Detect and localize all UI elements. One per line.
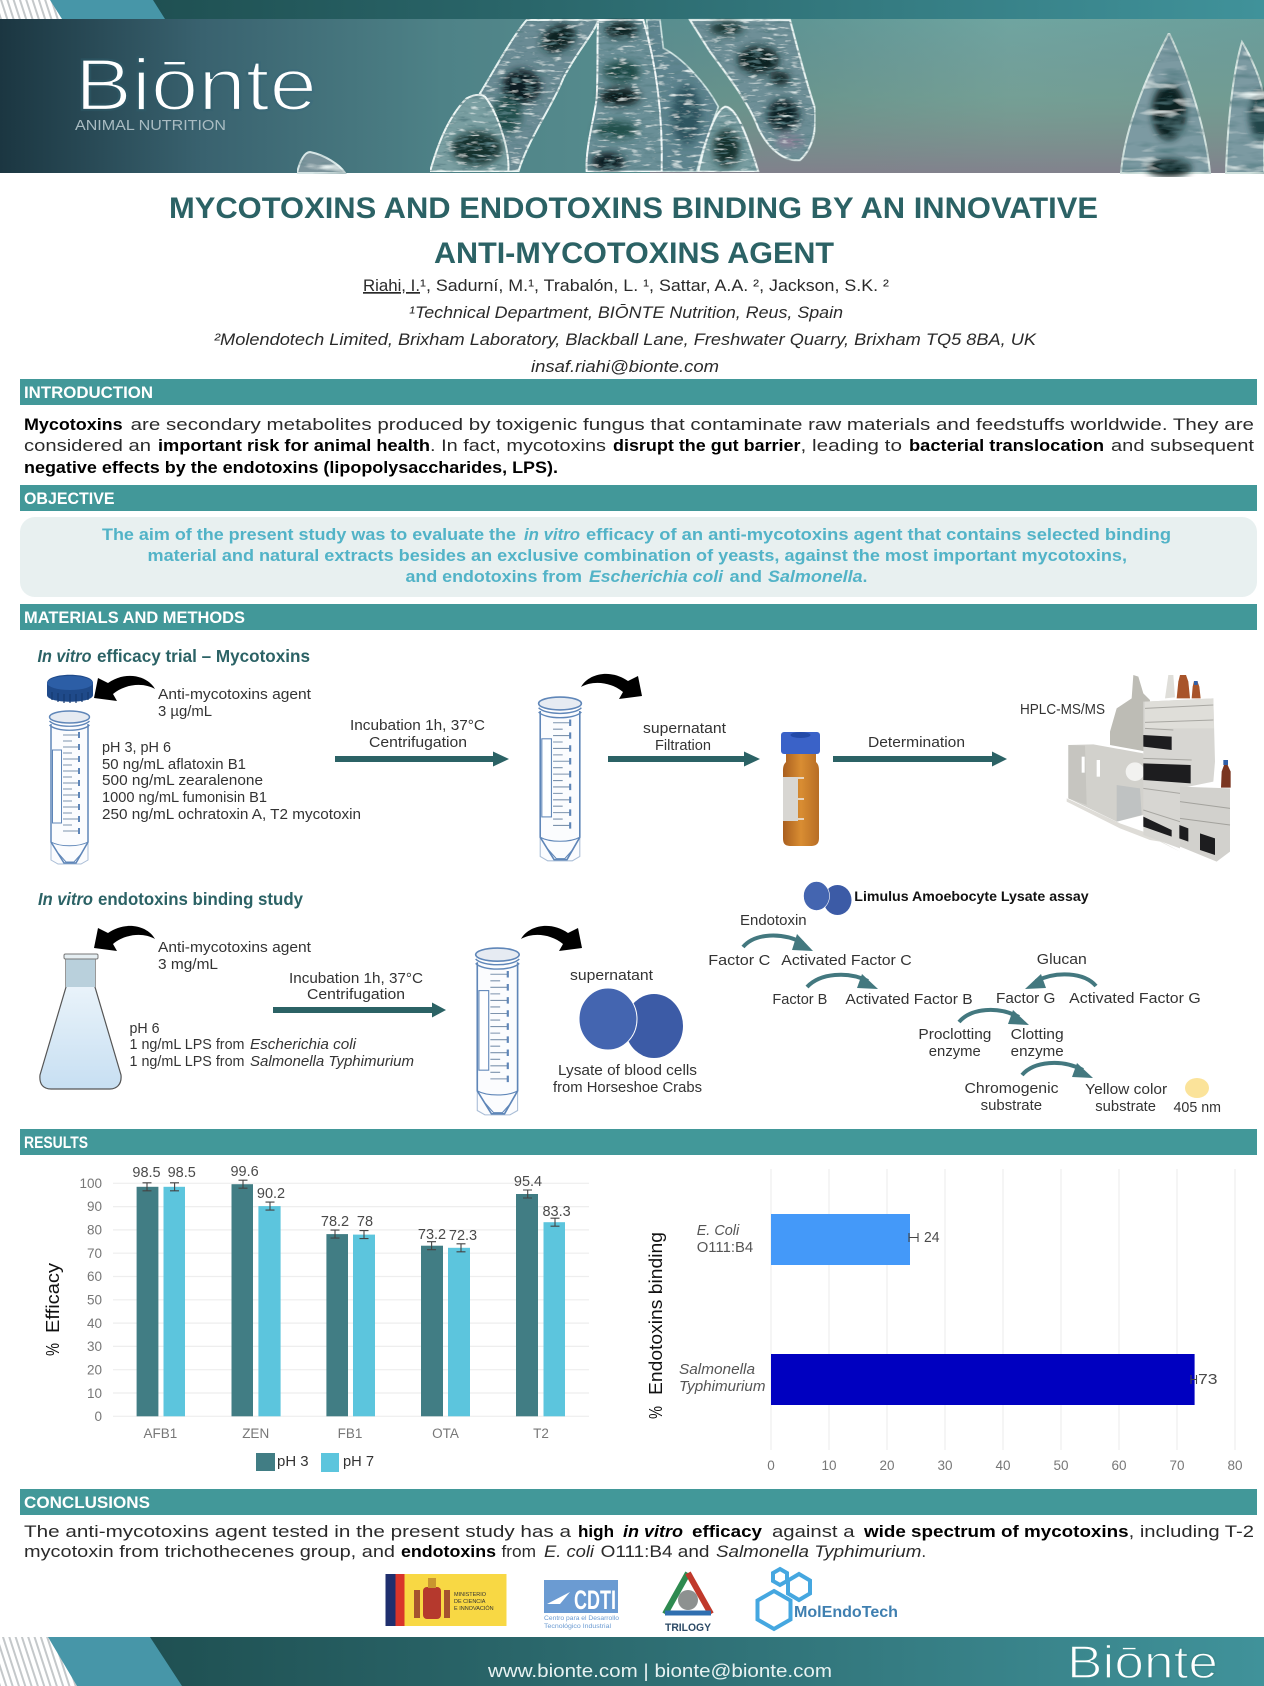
data labels: 95.4	[514, 1174, 542, 1190]
x axis labels: ZEN	[242, 1426, 269, 1441]
arrow: incubation	[273, 1002, 446, 1018]
data labels: 83.3	[542, 1204, 571, 1220]
heading: conclusions: CONCLUSIONS	[24, 1493, 150, 1512]
assay cascade labels: substrate	[1095, 1098, 1156, 1115]
x axis ticks: 50	[1053, 1458, 1069, 1473]
title	[169, 192, 1098, 270]
category labels: Typhimurium	[679, 1378, 766, 1395]
text block: introduction: . In fact, mycotoxins	[430, 436, 606, 455]
y axis ticks: 80	[87, 1222, 102, 1238]
subheading: mycotoxins trial: In vitro	[38, 646, 92, 666]
label: filtration	[643, 720, 727, 754]
data labels: 73	[1198, 1372, 1218, 1388]
logo: MolEndoTech: MolEndoTech	[794, 1604, 898, 1621]
text block: conclusions: in vitro	[623, 1522, 683, 1541]
text block: conclusions: high	[578, 1522, 614, 1541]
assay cascade labels: 405 nm	[1174, 1099, 1221, 1116]
panel: introduction	[20, 379, 1257, 477]
category labels	[679, 1222, 766, 1395]
legend	[256, 1453, 374, 1472]
logo: CDTI	[544, 1580, 619, 1630]
icon: black curved arrow	[521, 926, 582, 951]
logo: CDTI: CDTI	[574, 1585, 616, 1615]
bar chart: efficacy	[43, 1164, 589, 1472]
assay cascade labels: Factor C	[708, 952, 770, 969]
bars pH 7	[164, 1187, 565, 1416]
text block: mycotoxin concentrations	[102, 739, 361, 823]
text block: mycotoxin concentrations: 50 ng/mL aflatoxin B1	[102, 756, 246, 773]
y axis title: Efficacy	[43, 1263, 63, 1333]
text block: conclusions: efficacy	[692, 1522, 763, 1541]
data labels: 90.2	[257, 1186, 285, 1202]
objective callout: and endotoxins from	[406, 567, 582, 586]
text block: conclusions: E. coli	[544, 1542, 595, 1561]
bar: E. coli	[771, 1214, 910, 1265]
header banner	[0, 0, 1264, 177]
label: incubation: Incubation 1h, 37°C	[289, 970, 423, 987]
x axis labels: OTA	[432, 1426, 459, 1441]
assay cascade labels: Activated Factor B	[845, 991, 973, 1008]
data labels: 98.5	[168, 1165, 196, 1181]
arrows: cascade	[743, 934, 1096, 1078]
text block: introduction: bacterial translocation	[909, 436, 1104, 455]
icon: HPLC instrument	[1067, 675, 1231, 862]
x axis ticks: 40	[995, 1458, 1011, 1473]
label: agent dose	[158, 686, 312, 720]
authors and affiliations: ¹, Sadurní, M.¹, Trabalón, L. ¹, Sattar, A.A. ², Jackson, S.K. ²	[420, 276, 889, 295]
heading: objective	[20, 485, 1257, 511]
icon: black curved arrow	[94, 926, 155, 951]
heading: conclusions	[20, 1489, 1257, 1515]
label: agent dose	[158, 939, 312, 973]
text block: LPS concentrations: 1 ng/mL LPS from	[130, 1053, 244, 1070]
y axis title	[43, 1263, 63, 1356]
x axis ticks: 30	[937, 1458, 953, 1473]
objective callout: in vitro	[524, 525, 580, 544]
objective callout: and	[730, 567, 762, 586]
x axis ticks: 10	[821, 1458, 837, 1473]
label: agent dose: Anti-mycotoxins agent	[158, 939, 312, 956]
icon: blood cells	[579, 988, 683, 1058]
arrow: incubation	[335, 752, 509, 766]
label: incubation: Centrifugation	[369, 734, 467, 751]
text block: conclusions: Salmonella Typhimurium	[716, 1542, 921, 1561]
icon: amber vial	[781, 732, 820, 846]
panel: results	[20, 1129, 1257, 1473]
x axis ticks: 70	[1169, 1458, 1185, 1473]
label: incubation	[289, 970, 423, 1003]
title: MYCOTOXINS AND ENDOTOXINS BINDING BY AN INNOVATIVE	[169, 192, 1098, 225]
icon: centrifuge tube	[50, 711, 90, 864]
icon: black curved arrow	[94, 676, 155, 701]
y axis ticks: 40	[87, 1316, 102, 1331]
logo: Trilogy	[663, 1571, 713, 1634]
arrow: determination	[833, 752, 1007, 766]
label: agent dose: 3 mg/mL	[158, 956, 218, 973]
panel: limulus amoebocyte lysate assay	[708, 882, 1221, 1116]
authors and affiliations: Riahi, I.	[363, 276, 420, 295]
data labels	[132, 1164, 571, 1244]
category labels: E. Coli	[697, 1222, 740, 1239]
logo: Trilogy: TRILOGY	[665, 1622, 712, 1634]
text block: conclusions: O111:B4 and	[601, 1542, 709, 1561]
text block: conclusions: endotoxins	[401, 1542, 496, 1561]
x axis ticks: 60	[1111, 1458, 1127, 1473]
label: lysate source: from Horseshoe Crabs	[553, 1079, 702, 1096]
heading: materials and methods: MATERIALS AND METHODS	[24, 608, 245, 627]
text block: LPS concentrations: 1 ng/mL LPS from	[130, 1036, 244, 1053]
text block: LPS concentrations: Escherichia coli	[250, 1036, 357, 1053]
y axis ticks: 100	[79, 1176, 102, 1191]
data labels: 78.2	[321, 1214, 349, 1230]
heading: LAL assay: Limulus Amoebocyte Lysate assay	[854, 888, 1089, 904]
y axis ticks: 90	[87, 1199, 102, 1214]
authors and affiliations: insaf.riahi@bionte.com	[531, 357, 719, 376]
text block: introduction: important risk for animal health	[158, 436, 430, 455]
assay cascade labels: Activated Factor C	[781, 952, 912, 969]
subheading: endotoxin study: In vitro	[38, 889, 93, 909]
icon: blood cells small	[804, 882, 852, 915]
text block: mycotoxin concentrations: 1000 ng/mL fumonisin B1	[102, 789, 267, 806]
text block: introduction: Mycotoxins	[24, 415, 123, 434]
logo: Ministerio de Ciencia e Innovacion: DE CIENCIA	[454, 1599, 486, 1605]
icon: centrifuge tube	[476, 948, 519, 1115]
text block: conclusions: The anti-mycotoxins agent tested in the present study has a	[24, 1522, 572, 1541]
label: agent dose: 3 µg/mL	[158, 703, 212, 720]
assay cascade labels	[708, 912, 1221, 1116]
text block: LPS concentrations	[130, 1020, 414, 1070]
authors and affiliations: ¹Technical Department, BIŌNTE Nutrition, Reus, Spain	[409, 303, 843, 322]
y axis ticks: 50	[87, 1292, 102, 1308]
objective callout: material and natural extracts besides an exclusive combination of yeasts, against the most important mycotoxins,	[148, 546, 1127, 565]
assay cascade labels: enzyme	[929, 1043, 981, 1060]
text block: introduction: negative effects by the endotoxins (lipopolysaccharides, LPS).	[24, 458, 558, 477]
x axis ticks: 20	[879, 1458, 895, 1473]
y axis ticks: 70	[87, 1246, 102, 1261]
heading: introduction	[20, 379, 1257, 405]
heading: results	[20, 1129, 1257, 1155]
icon: black curved arrow	[581, 674, 642, 699]
x axis labels	[144, 1426, 549, 1441]
text block: introduction: , leading to	[800, 436, 902, 455]
assay cascade labels: Chromogenic	[964, 1080, 1059, 1097]
heading: introduction: INTRODUCTION	[24, 383, 153, 402]
objective callout: Escherichia coli	[589, 567, 724, 586]
error bars	[909, 1233, 1196, 1384]
objective callout: .	[863, 567, 867, 586]
label: lysate source	[553, 1062, 702, 1096]
y axis ticks: 30	[87, 1339, 102, 1354]
text block: introduction: are secondary metabolites produced by toxigenic fungus that contaminate raw materials and feedstuffs worldwide. They are	[131, 415, 1254, 434]
logo: Ministerio de Ciencia e Innovacion: MINISTERIO	[454, 1592, 487, 1598]
y axis title: %	[43, 1343, 63, 1356]
x axis labels: AFB1	[144, 1426, 177, 1441]
logo: Bionte: ANIMAL NUTRITION	[75, 117, 226, 134]
authors and affiliations	[214, 276, 1037, 376]
assay cascade labels: Activated Factor G	[1069, 990, 1201, 1007]
x axis labels: FB1	[338, 1426, 362, 1441]
objective callout: Salmonella	[768, 567, 863, 586]
text block: mycotoxin concentrations: pH 3, pH 6	[102, 739, 171, 756]
assay cascade labels: substrate	[981, 1097, 1042, 1114]
text block: conclusions: against a	[772, 1522, 855, 1541]
illustration: bacteria	[297, 18, 1264, 177]
y axis ticks	[79, 1176, 102, 1424]
bar chart: endotoxins binding	[646, 1169, 1243, 1473]
authors and affiliations: ²Molendotech Limited, Brixham Laboratory, Blackball Lane, Freshwater Quarry, Brixham TQ5 8BA, UK	[214, 330, 1037, 349]
label: supernatant: supernatant	[570, 967, 654, 984]
label: lysate source: Lysate of blood cells	[558, 1062, 697, 1079]
text block: mycotoxin concentrations: 250 ng/mL ochratoxin A, T2 mycotoxin	[102, 806, 361, 823]
text block: introduction: disrupt the gut barrier	[613, 436, 801, 455]
text block: introduction	[24, 415, 1254, 477]
x axis ticks: 0	[767, 1458, 775, 1473]
text block: mycotoxin concentrations: 500 ng/mL zearalenone	[102, 772, 263, 789]
y axis ticks: 10	[87, 1386, 102, 1401]
y axis ticks: 20	[87, 1362, 102, 1378]
icon: yellow drop	[1185, 1078, 1209, 1098]
heading: materials and methods	[20, 604, 1257, 630]
logo: Ministerio de Ciencia e Innovacion: E INNOVACIÓN	[454, 1605, 494, 1612]
label: determination: Determination	[868, 734, 965, 751]
text block: conclusions: , including T-2	[1129, 1522, 1254, 1541]
heading: results: RESULTS	[24, 1133, 88, 1152]
logo: Ministerio de Ciencia e Innovacion	[386, 1574, 506, 1626]
objective callout: The aim of the present study was to evaluate the	[102, 525, 516, 544]
data labels: 98.5	[132, 1165, 161, 1181]
logo: CDTI: Centro para el Desarrollo	[544, 1615, 619, 1622]
footer contact: www.bionte.com | bionte@bionte.com	[487, 1661, 832, 1681]
data labels: 73.2	[418, 1227, 446, 1243]
y axis ticks: 0	[94, 1409, 102, 1424]
logo: Bionte: Biōnte	[75, 45, 317, 126]
logo: MolEndoTech	[758, 1569, 898, 1629]
text block: LPS concentrations: pH 6	[130, 1020, 160, 1037]
text block: conclusions: from	[502, 1542, 536, 1561]
assay cascade labels: enzyme	[1011, 1043, 1064, 1060]
objective callout: efficacy of an anti-mycotoxins agent that contains selected binding	[586, 525, 1171, 544]
x axis labels: T2	[533, 1426, 549, 1441]
legend: pH 3	[277, 1453, 309, 1470]
data labels: 78	[357, 1214, 373, 1230]
category labels: O111:B4	[697, 1239, 753, 1256]
title: ANTI-MYCOTOXINS AGENT	[434, 237, 834, 270]
y axis ticks: 60	[87, 1269, 102, 1284]
assay cascade labels: Endotoxin	[740, 912, 807, 929]
heading: objective: OBJECTIVE	[24, 489, 114, 508]
arrow: filtration	[608, 752, 760, 766]
label: HPLC: HPLC-MS/MS	[1020, 701, 1105, 718]
text block: LPS concentrations: Salmonella Typhimurium	[250, 1053, 414, 1070]
objective callout	[20, 517, 1257, 597]
text block: introduction: and subsequent	[1111, 436, 1254, 455]
assay cascade labels: Factor G	[996, 990, 1055, 1007]
label: agent dose: Anti-mycotoxins agent	[158, 686, 312, 703]
icon: centrifuge tube	[539, 697, 581, 861]
assay cascade labels: Factor B	[772, 991, 827, 1008]
label: incubation: Incubation 1h, 37°C	[350, 717, 485, 734]
panel: materials and methods	[20, 604, 1257, 1116]
panel: objective	[20, 485, 1257, 597]
footer	[0, 1636, 1264, 1686]
data labels: 72.3	[449, 1228, 477, 1244]
error bars	[142, 1180, 560, 1252]
bar: Salmonella	[771, 1354, 1195, 1405]
data labels	[924, 1230, 1218, 1388]
text block: conclusions: wide spectrum of mycotoxins	[863, 1522, 1129, 1541]
text block: conclusions: .	[921, 1542, 926, 1561]
y axis title: Endotoxins binding	[646, 1232, 666, 1395]
data labels: 24	[924, 1230, 940, 1246]
icon: erlenmeyer flask	[40, 954, 121, 1089]
x axis ticks: 80	[1227, 1458, 1243, 1473]
assay cascade labels: Glucan	[1037, 951, 1087, 968]
data labels: 99.6	[230, 1164, 259, 1180]
subheading: endotoxin study: endotoxins binding study	[98, 889, 303, 909]
panel: conclusions	[20, 1489, 1257, 1561]
assay cascade labels: Clotting	[1011, 1026, 1064, 1043]
text block: introduction: considered an	[24, 436, 151, 455]
x axis ticks	[767, 1458, 1243, 1473]
logo: CDTI: Tecnológico Industrial	[544, 1623, 612, 1630]
category labels: Salmonella	[679, 1361, 755, 1378]
legend: pH 7	[343, 1453, 374, 1470]
bars pH 3	[137, 1184, 538, 1416]
y axis title: %	[646, 1406, 666, 1419]
label: incubation	[350, 717, 485, 751]
assay cascade labels: Proclotting	[918, 1026, 991, 1043]
icon: blue cap	[47, 675, 93, 703]
assay cascade labels: Yellow color	[1085, 1081, 1167, 1098]
label: filtration: Filtration	[655, 737, 711, 754]
subheading: mycotoxins trial: efficacy trial – Mycotoxins	[97, 646, 310, 666]
text block: conclusions	[24, 1522, 1254, 1561]
label: filtration: supernatant	[643, 720, 727, 737]
text block: conclusions: mycotoxin from trichothecenes group, and	[24, 1542, 395, 1561]
label: incubation: Centrifugation	[307, 986, 405, 1003]
